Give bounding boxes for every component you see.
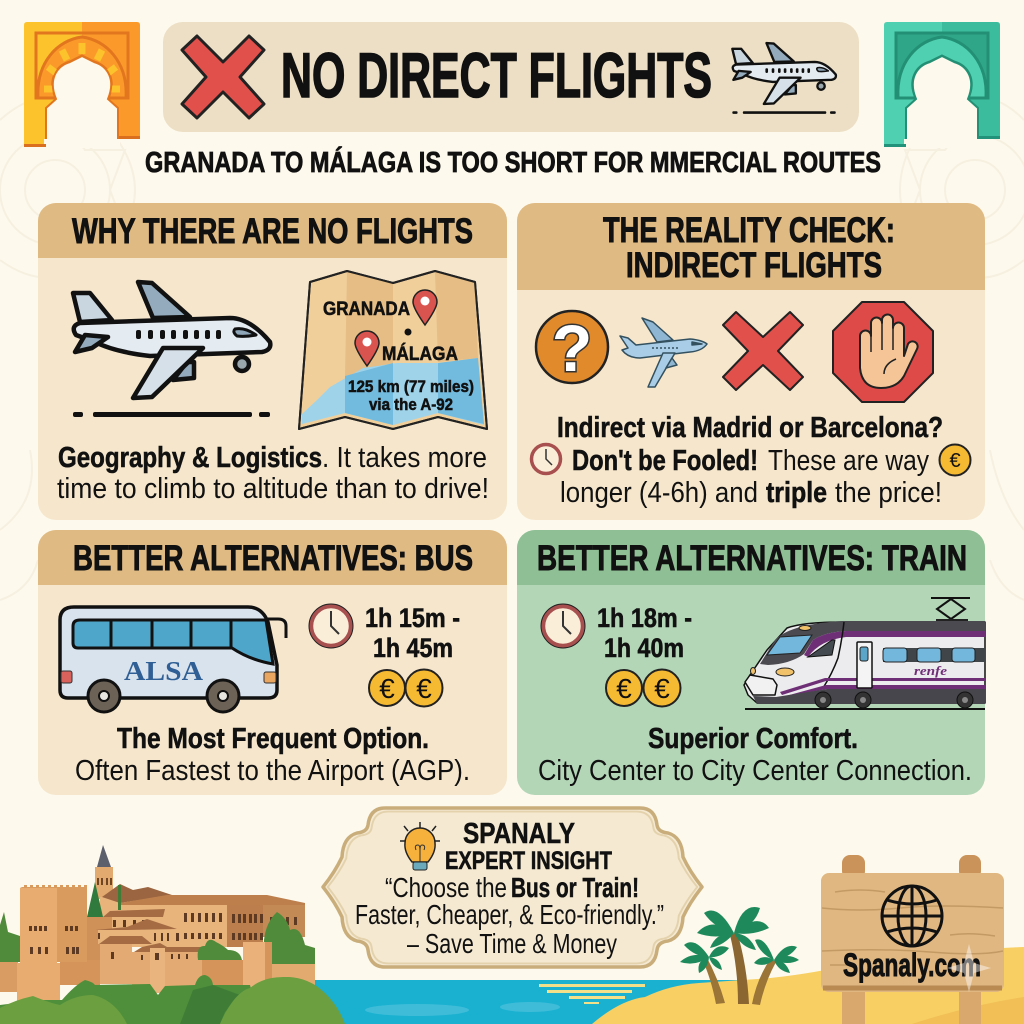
icon: euro coins: €	[616, 673, 632, 704]
arch: left orange	[24, 22, 140, 148]
icon: euro coins	[369, 670, 442, 706]
body text: time to climb to altitude than to drive!	[57, 473, 489, 505]
icon: ALSA bus	[60, 607, 286, 712]
title: NO DIRECT FLIGHTS	[281, 41, 712, 111]
small tree and wall	[198, 940, 242, 960]
callout: expert insight: SPANALY	[463, 818, 575, 850]
body text	[75, 723, 470, 787]
body text: triple	[766, 477, 827, 509]
map: MÁLAGA	[382, 343, 458, 365]
icon: renfe train	[744, 598, 985, 710]
heading: INDIRECT FLIGHTS	[626, 246, 882, 285]
large tree and right tower	[263, 912, 315, 965]
icon: clock	[309, 604, 353, 648]
sign: Spanaly.com	[821, 855, 1004, 1024]
icon: red cross	[182, 36, 264, 118]
icon: euro coin: €	[949, 450, 961, 472]
icon: clock	[532, 444, 560, 474]
panel: why there are no flights	[38, 203, 507, 520]
icon: euro coins: €	[654, 673, 670, 704]
map: via the A-92	[369, 395, 453, 414]
body text: Geography & Logistics	[58, 442, 322, 474]
palace walls	[120, 903, 227, 947]
icon: airplane on runway	[73, 282, 270, 417]
heading	[603, 211, 895, 285]
bell tower	[97, 845, 111, 867]
beach	[592, 947, 1024, 1024]
icon: euro coins: €	[379, 673, 395, 704]
icon: globe	[882, 886, 942, 946]
panel: bus	[38, 530, 507, 795]
icon: question mark: ?	[552, 311, 592, 385]
icon: light bulb	[400, 822, 440, 870]
illustration: Alhambra	[0, 845, 345, 1024]
body text	[57, 442, 489, 505]
body text: Often Fastest to the Airport (AGP).	[75, 755, 470, 787]
hillside	[0, 975, 260, 1024]
far left tree and wall	[0, 912, 20, 962]
heading: THE REALITY CHECK:	[603, 211, 895, 250]
panel: reality check	[517, 203, 985, 520]
travel time: 1h 18m -	[597, 603, 692, 633]
icon: clock	[541, 604, 585, 648]
arch: right teal	[884, 22, 1000, 148]
travel time: 1h 15m -	[365, 603, 460, 633]
travel time	[597, 603, 692, 663]
body text	[538, 723, 972, 787]
heading: WHY THERE ARE NO FLIGHTS	[72, 212, 473, 251]
body text: Indirect via Madrid or Barcelona?	[557, 412, 943, 444]
body text	[532, 412, 970, 509]
callout: expert insight: Faster, Cheaper, & Eco-friendly.”	[355, 899, 664, 930]
body text: Don't be Fooled!	[572, 445, 758, 477]
callout: expert insight: “Choose the	[385, 872, 507, 903]
travel time: 1h 40m	[604, 633, 684, 663]
sea	[315, 980, 760, 1024]
body text: longer (4-6h) and	[560, 477, 758, 509]
map: GRANADA	[323, 299, 410, 320]
icon: renfe train: renfe	[914, 663, 947, 678]
body text: Superior Comfort.	[648, 723, 858, 755]
callout: expert insight: EXPERT INSIGHT	[445, 847, 612, 875]
body text: . It takes more	[322, 442, 487, 474]
body text: The Most Frequent Option.	[117, 723, 429, 755]
gabled roofs	[102, 884, 172, 903]
map: 125 km (77 miles)	[348, 377, 474, 396]
icon: airplane	[732, 43, 836, 114]
left tower	[60, 960, 100, 985]
icon: stop hand	[833, 302, 933, 402]
icon: ALSA bus: ALSA	[124, 656, 204, 686]
body text: City Center to City Center Connection.	[538, 755, 972, 787]
sea reflections	[365, 984, 645, 1016]
callout: expert insight	[323, 808, 702, 967]
icon: euro coins	[606, 670, 680, 706]
body text: These are way	[768, 445, 929, 477]
illustration: palm trees	[680, 907, 799, 1005]
callout: expert insight: – Save Time & Money	[407, 928, 617, 959]
callout: expert insight: Bus or Train!	[511, 872, 639, 903]
icon: euro coin	[940, 444, 970, 476]
map	[299, 271, 487, 429]
heading: BETTER ALTERNATIVES: BUS	[73, 539, 473, 578]
icon: question mark	[536, 311, 608, 385]
travel time: 1h 45m	[373, 633, 453, 663]
sparkle	[947, 944, 991, 992]
icon: red cross	[723, 312, 803, 390]
cypress	[87, 882, 103, 917]
title banner	[163, 22, 859, 132]
icon: blue airplane	[620, 318, 707, 387]
travel time	[365, 603, 460, 663]
lower pavilions	[87, 917, 120, 979]
icon: euro coins: €	[416, 673, 432, 704]
panel: train	[517, 530, 985, 795]
body text: the price!	[835, 477, 942, 509]
